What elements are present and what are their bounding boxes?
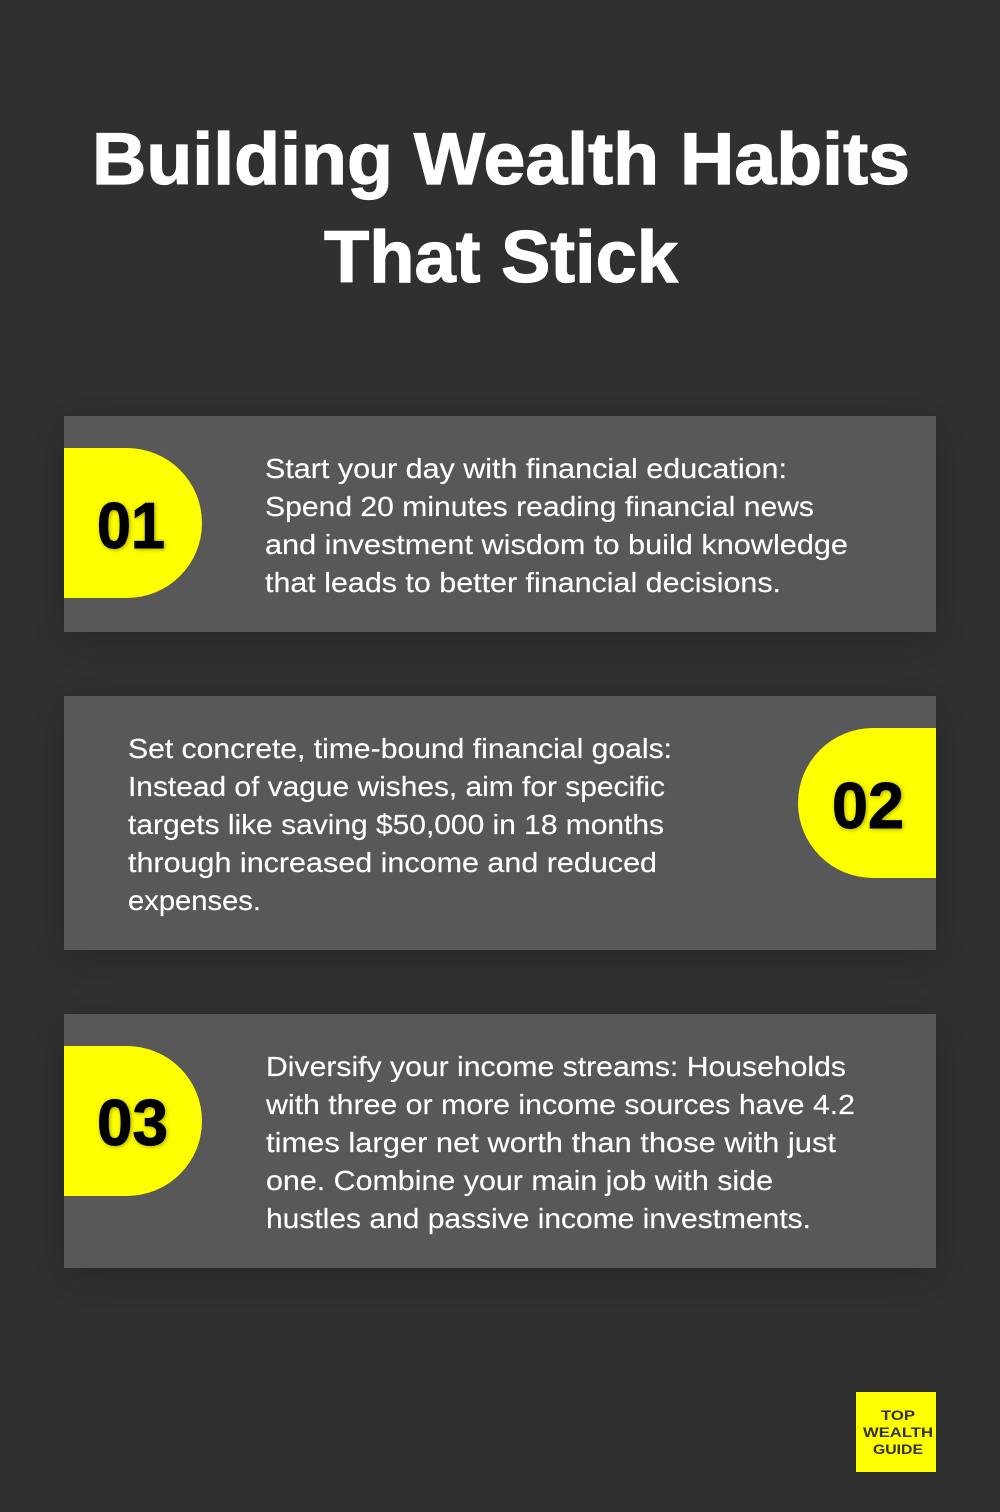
text: step 02 description: expenses.	[128, 885, 261, 916]
text: step 01 description: and investment wisdom to build knowledge	[265, 529, 848, 560]
text: step 01 description: Start your day with financial education:	[265, 453, 787, 484]
title	[92, 119, 910, 298]
text: step 03 description: hustles and passive income investments.	[266, 1203, 811, 1234]
text: step 03 description	[265, 1051, 855, 1234]
panel: step 02	[64, 696, 936, 950]
text: step 02 description	[128, 733, 672, 916]
text: step 03 description: Diversify your income streams: Households	[266, 1051, 846, 1082]
text: step 02 description: Set concrete, time-bound financial goals:	[128, 733, 672, 764]
badge: 01: 01	[97, 489, 165, 562]
text: step 02 description: through increased income and reduced	[128, 847, 657, 878]
text: step 01 description: that leads to better financial decisions.	[265, 567, 781, 598]
text: step 02 description: targets like saving $50,000 in 18 months	[128, 809, 664, 840]
badge: 03	[64, 1046, 202, 1196]
logo: Top Wealth Guide: TOP	[881, 1408, 915, 1423]
panel: step 03	[64, 1014, 936, 1268]
text: step 01 description: Spend 20 minutes reading financial news	[265, 491, 814, 522]
badge: 03: 03	[97, 1086, 168, 1159]
logo: Top Wealth Guide	[856, 1392, 936, 1472]
text: step 01 description	[265, 453, 848, 598]
badge: 01	[64, 448, 202, 598]
text: step 03 description: with three or more income sources have 4.2	[265, 1089, 855, 1120]
badge: 02: 02	[832, 769, 904, 842]
panel: step 01	[64, 416, 936, 632]
text: step 03 description: one. Combine your main job with side	[266, 1165, 773, 1196]
text: step 02 description: Instead of vague wishes, aim for specific	[128, 771, 665, 802]
title: Building Wealth Habits	[92, 119, 910, 200]
logo: Top Wealth Guide: WEALTH	[863, 1425, 933, 1440]
title: That Stick	[324, 217, 678, 298]
logo: Top Wealth Guide: GUIDE	[873, 1442, 923, 1457]
badge: 02	[798, 728, 936, 878]
text: step 03 description: times larger net worth than those with just	[266, 1127, 836, 1158]
